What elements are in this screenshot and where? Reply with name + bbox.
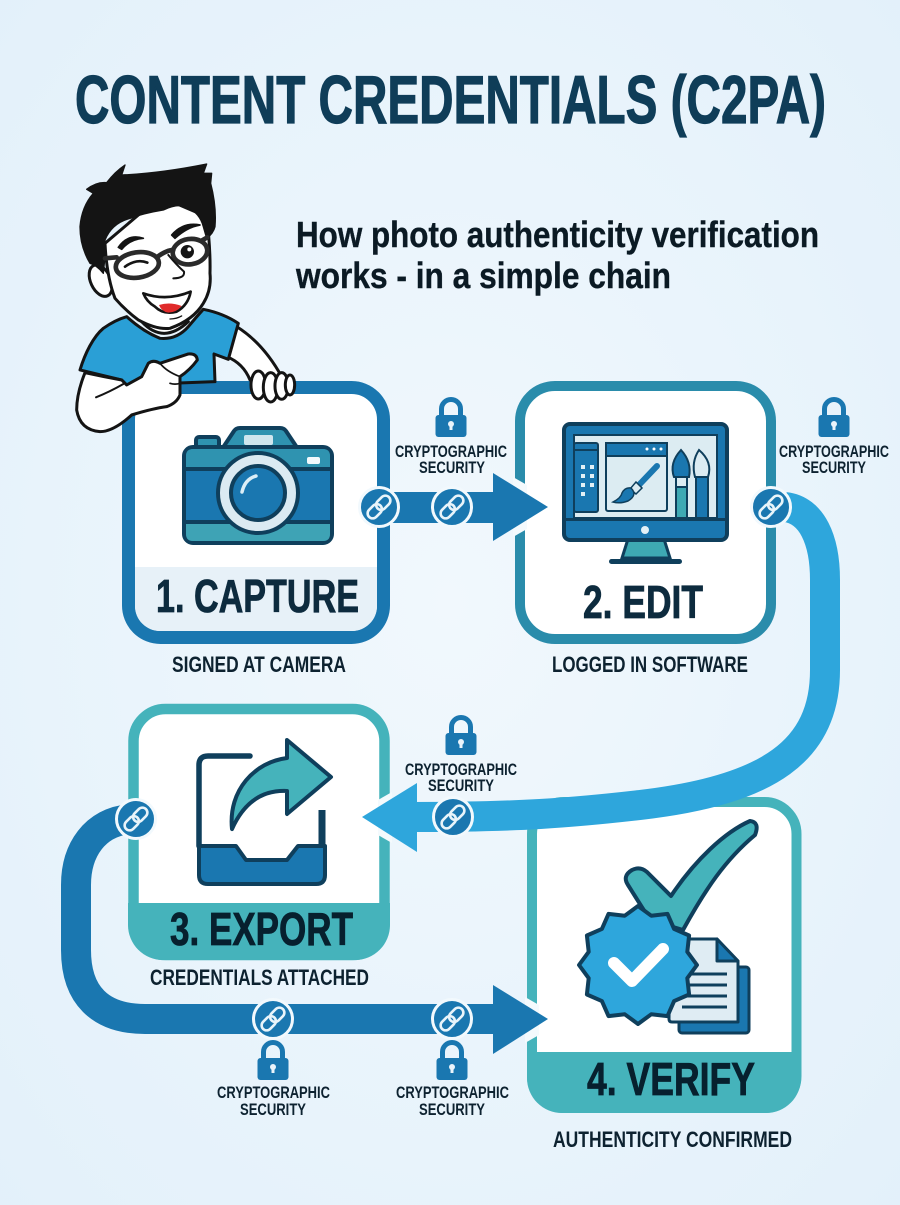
- security label 2: SECURITY: [802, 459, 866, 477]
- caption: edit: LOGGED IN SOFTWARE: [552, 652, 748, 677]
- step label: export: 3. EXPORT: [170, 903, 353, 955]
- arrow: edit to export: [362, 507, 825, 852]
- link icons along chain: [116, 488, 790, 1038]
- step label: edit: 2. EDIT: [583, 576, 703, 628]
- label band: verify: [527, 1052, 801, 1113]
- security label 5: [396, 1042, 509, 1119]
- subtitle: How photo authenticity verification: [296, 214, 819, 255]
- label band: export: [128, 903, 390, 960]
- panel: 4 verify: [527, 802, 801, 1113]
- security label 5: SECURITY: [419, 1101, 485, 1119]
- arrow: export to verify: [76, 819, 548, 1054]
- icon: verified badge with check and document: [579, 821, 757, 1033]
- security label 3: SECURITY: [428, 777, 494, 795]
- subtitle: [295, 214, 819, 296]
- panel: 1 capture: [128, 388, 384, 638]
- icon: export tray: [199, 740, 331, 884]
- caption: export: CREDENTIALS ATTACHED: [150, 965, 369, 990]
- panel: 3 export: [128, 709, 390, 960]
- caption: capture: SIGNED AT CAMERA: [172, 652, 346, 677]
- security label 3: [405, 718, 517, 795]
- security label 2: [779, 400, 889, 477]
- icon: monitor: [564, 424, 727, 564]
- label band: capture: [135, 567, 377, 631]
- panel: 2 edit: [520, 386, 771, 639]
- step label: capture: 1. CAPTURE: [156, 570, 359, 622]
- step label: verify: 4. VERIFY: [587, 1053, 755, 1105]
- arrow: capture to edit: [380, 473, 548, 541]
- security label 5: CRYPTOGRAPHIC: [396, 1084, 509, 1102]
- security label 4: SECURITY: [240, 1101, 306, 1119]
- security label 3: CRYPTOGRAPHIC: [405, 761, 517, 779]
- security label 1: CRYPTOGRAPHIC: [395, 443, 507, 461]
- security label 1: SECURITY: [419, 459, 485, 477]
- security label 4: [217, 1042, 330, 1119]
- security label 1: [395, 400, 507, 477]
- security label 4: CRYPTOGRAPHIC: [217, 1084, 330, 1102]
- mascot: winking man pointing: [77, 164, 295, 432]
- icon: camera: [184, 428, 332, 543]
- caption: verify: AUTHENTICITY CONFIRMED: [553, 1127, 792, 1152]
- subtitle: works - in a simple chain: [295, 255, 671, 296]
